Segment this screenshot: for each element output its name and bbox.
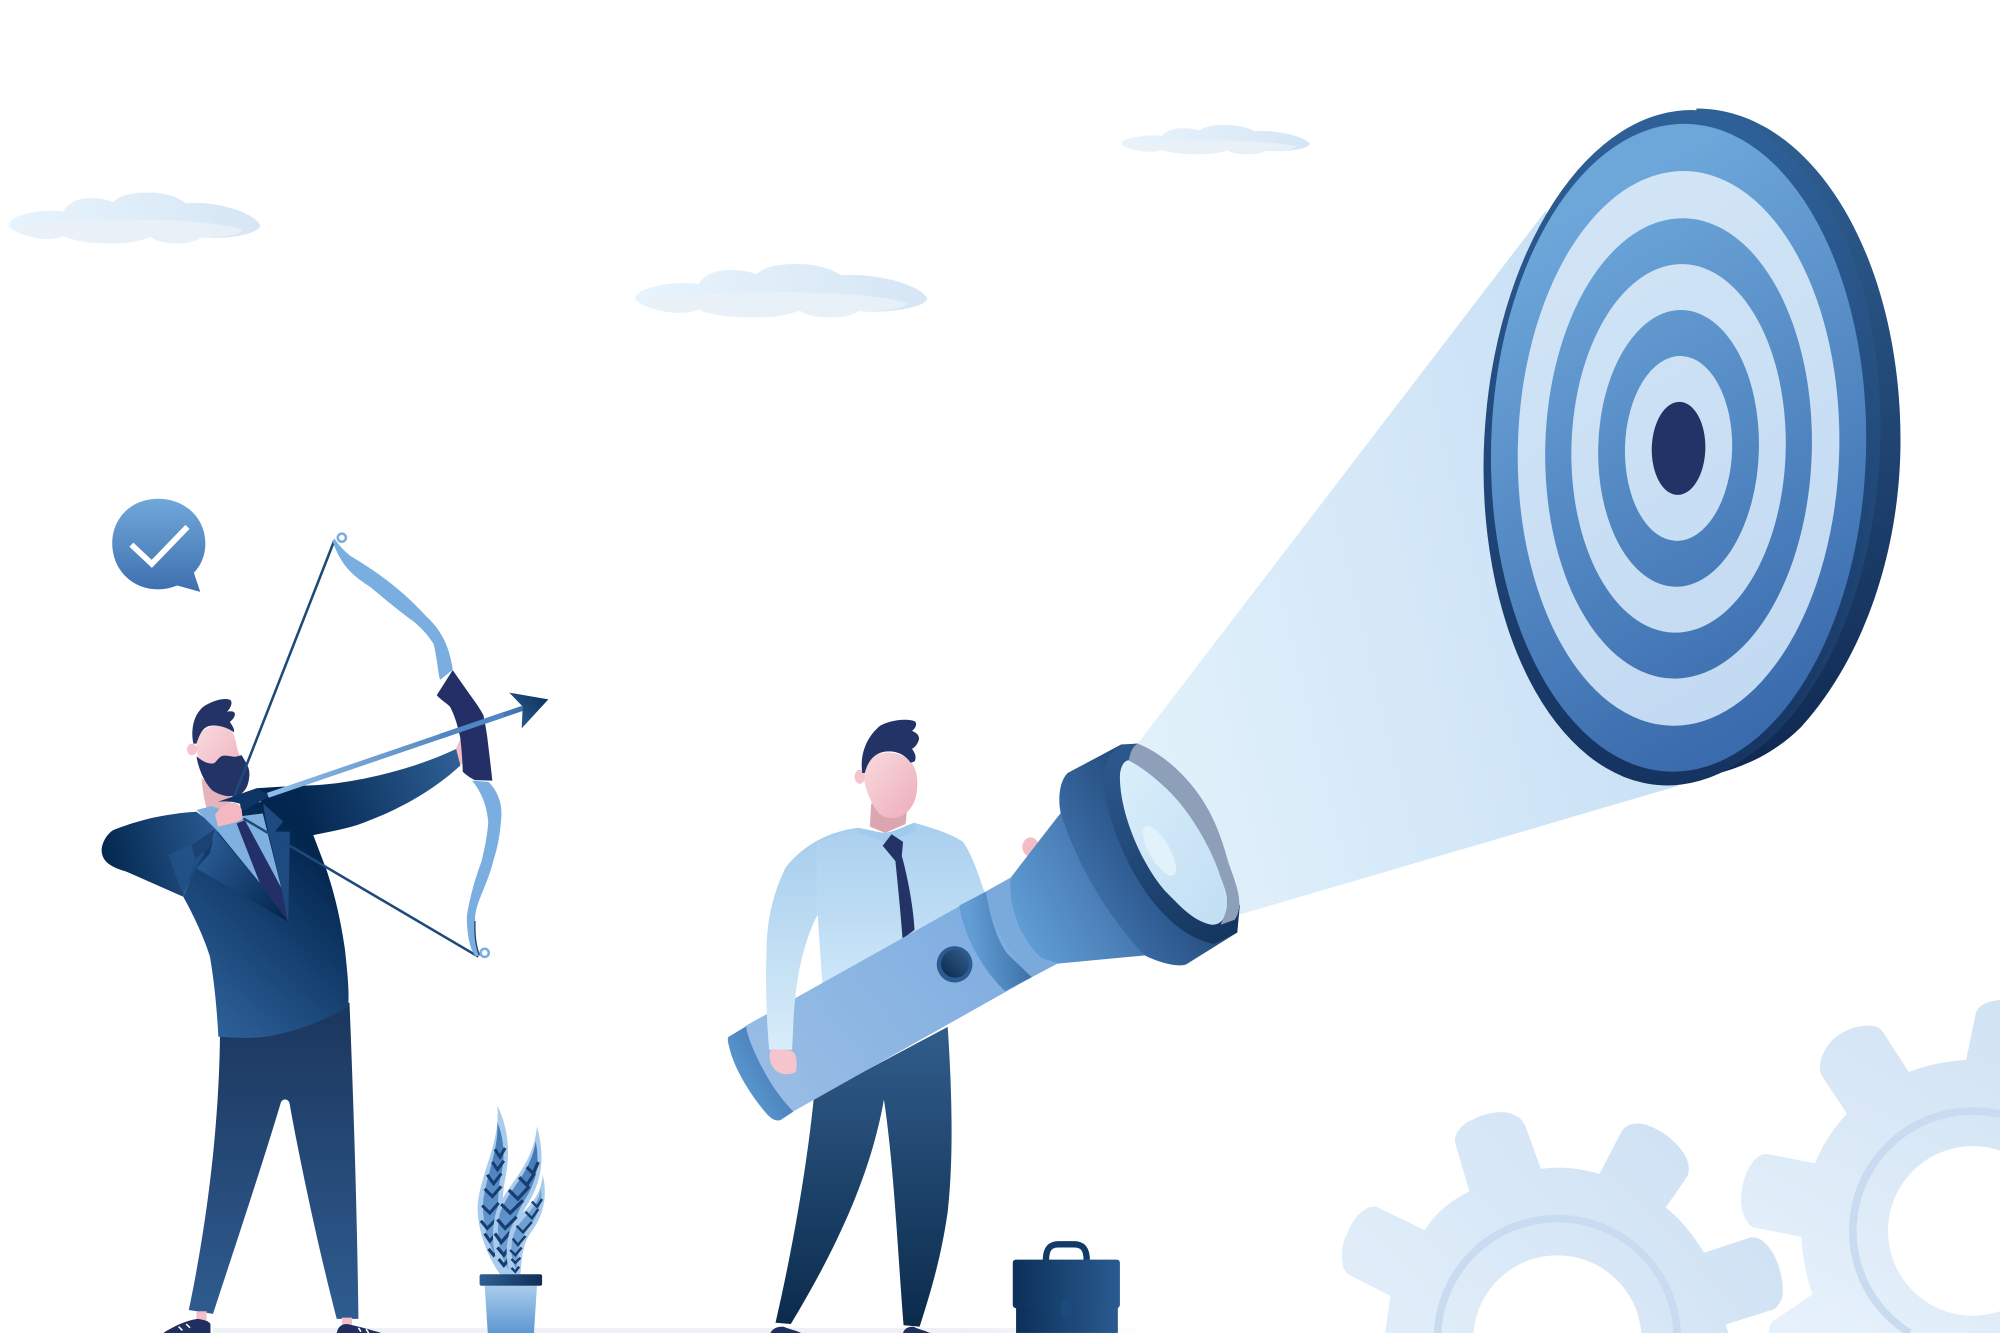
left arm xyxy=(102,812,219,897)
jacket lapels xyxy=(192,804,290,922)
target: side band xyxy=(1475,103,1897,790)
necktie xyxy=(237,820,288,922)
face xyxy=(196,726,245,788)
flashlight body xyxy=(731,878,1032,1120)
target: rings xyxy=(1483,119,1874,777)
flashlight tail cap xyxy=(728,1026,793,1121)
torso xyxy=(183,797,349,1038)
necktie xyxy=(883,834,915,939)
target: back edge xyxy=(1681,108,1901,781)
flashlight head xyxy=(1059,744,1239,965)
pot rim xyxy=(480,1274,542,1286)
pants xyxy=(189,1003,358,1319)
bow string xyxy=(233,541,478,957)
cloud: top right xyxy=(1121,125,1310,154)
bow xyxy=(333,534,504,957)
shoes xyxy=(163,1311,381,1333)
hair xyxy=(862,720,919,773)
gear: left xyxy=(1342,1112,1783,1333)
target xyxy=(1467,100,1901,796)
hand xyxy=(770,1049,797,1074)
briefcase clasp xyxy=(1061,1300,1071,1318)
flashlight light band xyxy=(986,878,1057,977)
hair xyxy=(192,699,235,744)
leaf: right xyxy=(507,1175,545,1274)
man holding flashlight: arm and hand over flashlight xyxy=(766,828,857,1074)
pants xyxy=(776,1027,952,1327)
gear: right xyxy=(1741,1000,2000,1333)
arrow shaft over grip xyxy=(440,715,504,736)
shoes xyxy=(770,1327,930,1333)
flashlight bezel xyxy=(1129,744,1239,925)
flashlight rim xyxy=(1104,744,1240,944)
flashlight neck xyxy=(1010,813,1145,964)
sleeve xyxy=(766,828,857,1050)
arrow xyxy=(268,693,548,795)
briefcase flap xyxy=(1013,1260,1120,1308)
arm fold xyxy=(168,844,195,897)
pot xyxy=(485,1286,537,1333)
bow hand xyxy=(456,736,468,764)
neck xyxy=(202,778,232,813)
flashlight xyxy=(728,744,1240,1121)
beard xyxy=(196,755,249,796)
neck xyxy=(870,804,907,833)
drawing hand xyxy=(215,803,243,827)
arrow nock in hand xyxy=(218,788,270,811)
icon: speech bubble with check mark xyxy=(112,499,205,592)
far hand xyxy=(1022,837,1039,857)
flashlight glass xyxy=(1120,760,1227,925)
right arm xyxy=(256,749,460,842)
ear xyxy=(187,744,197,755)
ear xyxy=(855,770,865,784)
flashlight collar band xyxy=(959,892,1032,991)
briefcase xyxy=(1013,1244,1120,1333)
cloud: left xyxy=(9,193,260,243)
briefcase lower body xyxy=(1016,1301,1118,1333)
ground strip xyxy=(213,1328,1157,1333)
target: rim xyxy=(1467,100,1892,796)
light beam xyxy=(1129,211,1679,917)
cloud: centre xyxy=(635,264,927,317)
potted plant xyxy=(478,1106,545,1333)
flashlight button xyxy=(937,946,972,983)
briefcase handle xyxy=(1046,1244,1087,1260)
shirt torso xyxy=(818,823,985,989)
man holding flashlight: body xyxy=(770,720,1039,1333)
leaf: left xyxy=(478,1106,510,1274)
flashlight glare xyxy=(1137,821,1182,880)
face xyxy=(864,752,917,818)
bow grip xyxy=(437,670,492,781)
shirt collar shade xyxy=(857,823,916,842)
archer businessman xyxy=(102,534,548,1333)
leaf: middle xyxy=(493,1126,541,1274)
shirt xyxy=(196,806,288,921)
